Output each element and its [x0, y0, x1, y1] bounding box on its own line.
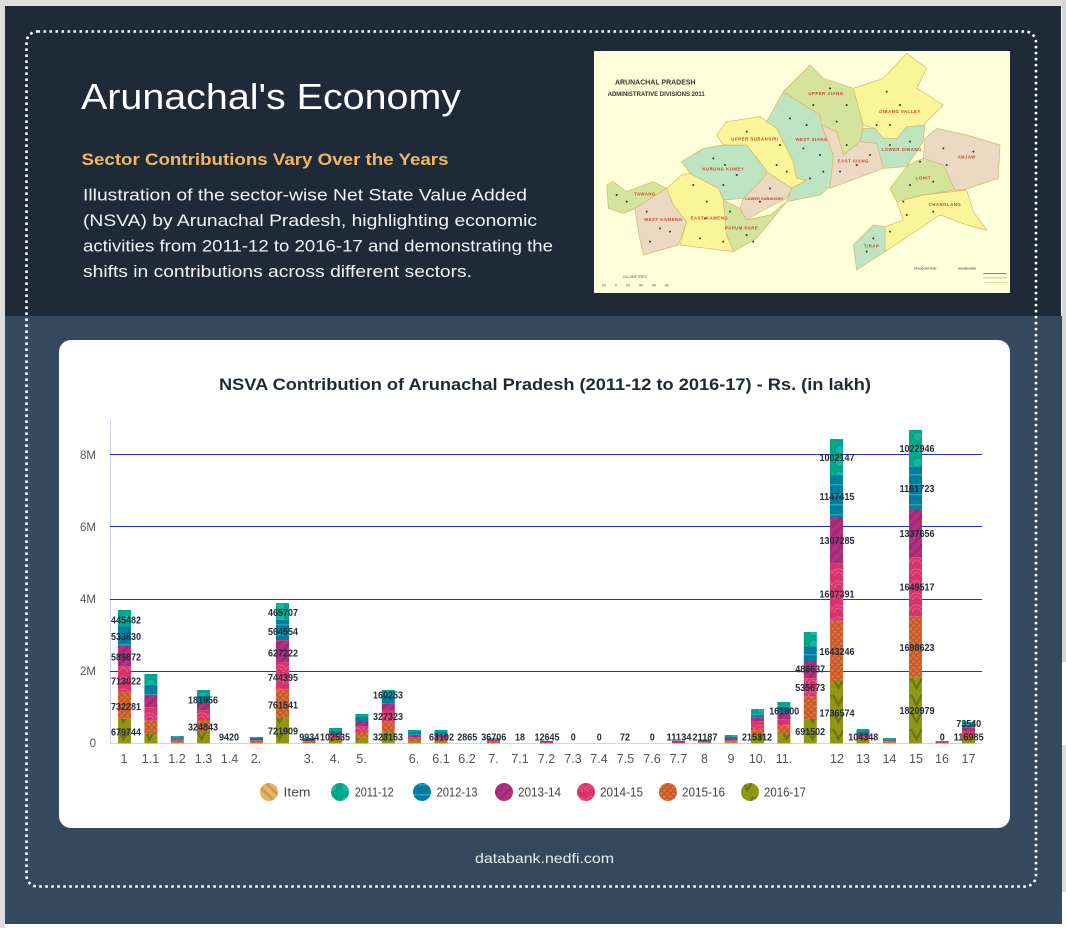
bar: item 6.	[408, 730, 421, 743]
map: Arunachal Pradesh administrative divisions: 20 0 20 40 60 80	[602, 283, 669, 287]
x axis labels: 15	[909, 752, 923, 766]
x axis labels: 16	[935, 752, 949, 766]
legend: 2013-14	[518, 786, 561, 800]
x axis labels: 10.	[749, 752, 766, 766]
x axis labels: 8	[701, 752, 708, 766]
map: Arunachal Pradesh administrative divisions: LOHIT	[916, 175, 931, 180]
x axis labels	[121, 752, 975, 766]
data labels: 1698623	[900, 642, 935, 654]
x axis labels: 14	[883, 752, 896, 766]
x axis labels: 7.5	[617, 752, 634, 766]
data labels: 589872	[111, 651, 141, 663]
data labels: 721909	[268, 725, 298, 737]
y axis labels: 2M	[80, 666, 96, 678]
chart axes and gridlines	[110, 420, 982, 744]
bar: item 3.	[303, 738, 316, 743]
source text: databank.nedfi.com	[475, 850, 614, 866]
x axis labels: 7.7	[670, 752, 687, 766]
data labels: 327323	[373, 711, 403, 723]
data labels: 713022	[111, 676, 141, 688]
data labels: 761541	[268, 699, 298, 711]
data labels: 1161723	[900, 483, 935, 495]
x axis labels: 4.	[330, 752, 340, 766]
description text: Illustration of the sector-wise Net State Value Added	[83, 186, 527, 205]
x axis labels: 7.	[488, 752, 499, 766]
bar: unlabelled category after 5.	[382, 690, 395, 743]
map: Arunachal Pradesh administrative divisions: TAWANG	[634, 192, 656, 197]
legend: 2015-16	[682, 786, 725, 800]
data labels: 465707	[268, 607, 298, 619]
data labels: 732281	[111, 701, 141, 713]
legend: 2012-13	[436, 786, 478, 800]
bar: item 14	[883, 738, 896, 743]
data labels: 1607391	[820, 588, 855, 600]
bar: item 13	[856, 729, 870, 743]
bar: unlabelled category after 11.	[804, 632, 817, 743]
data labels: 1022946	[900, 443, 935, 455]
map: Arunachal Pradesh administrative divisions: CHANGLANG	[929, 202, 961, 207]
description text: activities from 2011-12 to 2016-17 and demonstrating the	[83, 237, 553, 256]
bar: item 6.1	[434, 730, 448, 743]
map: Arunachal Pradesh administrative divisions: BOUNDARIES	[958, 266, 976, 270]
data labels: 1820979	[900, 705, 935, 717]
map: Arunachal Pradesh administrative divisions: HEADQUARTERS	[914, 266, 937, 270]
x axis labels: 1.1	[142, 752, 159, 766]
data labels: 323163	[373, 731, 403, 743]
data labels: 564554	[268, 626, 298, 638]
data labels: 1643246	[820, 646, 855, 658]
data labels: 1337656	[900, 528, 935, 540]
map: Arunachal Pradesh administrative divisions: WEST SIANG	[795, 137, 828, 142]
data labels: 116985	[954, 731, 984, 743]
bar: item 1.1	[144, 674, 157, 743]
bar: item 16	[936, 741, 949, 743]
x axis labels: 17	[962, 752, 975, 766]
description text: (NSVA) by Arunachal Pradesh, highlighting economic	[83, 211, 538, 230]
data labels: 18	[515, 731, 525, 743]
y axis labels: 0	[90, 738, 96, 750]
bar: unlabelled category after 2.	[276, 603, 289, 743]
data labels: 21187	[692, 731, 718, 743]
legend	[260, 783, 806, 801]
data labels: 1736574	[820, 707, 855, 719]
data labels: 1307285	[820, 535, 855, 547]
data labels: 535673	[795, 682, 825, 694]
legend: 2014-15	[600, 786, 643, 800]
y axis labels: 4M	[80, 594, 96, 606]
bar: item 7.	[487, 738, 500, 743]
bar: item 17	[962, 722, 975, 743]
x axis labels: 7.4	[590, 752, 608, 766]
data labels: 533830	[111, 631, 141, 643]
data labels: 1002147	[820, 452, 855, 464]
map: Arunachal Pradesh administrative divisions: UPPER SUBANSIRI	[731, 137, 779, 142]
map: Arunachal Pradesh administrative divisions: EAST SIANG	[838, 159, 869, 164]
bar: item 8	[698, 740, 711, 743]
x axis labels: 12	[830, 752, 844, 766]
data labels: 215312	[742, 731, 772, 743]
bar: item 5.	[355, 714, 368, 743]
data labels: 0	[940, 731, 945, 743]
bar: item 1.2	[171, 736, 184, 743]
bar: item 11.	[777, 702, 790, 743]
bar: item 4.	[329, 728, 342, 743]
bar: item 10.	[751, 709, 764, 743]
legend: Item	[284, 786, 310, 800]
x axis labels: 7.1	[511, 752, 529, 766]
chart title: NSVA Contribution of Arunachal Pradesh (2011-12 to 2016-17) - Rs. (in lakh)	[219, 375, 871, 394]
data labels: 12645	[534, 731, 560, 743]
x axis labels: 7.2	[538, 752, 555, 766]
description text	[83, 186, 553, 281]
map: Arunachal Pradesh administrative divisions: PAPUM PARE	[725, 225, 758, 230]
data labels: 679744	[111, 726, 141, 738]
bar: item 2.	[250, 737, 263, 743]
data labels: 691502	[795, 726, 825, 738]
map: Arunachal Pradesh administrative divisions: ANJAW	[958, 155, 976, 160]
data labels: 160253	[373, 689, 403, 701]
x axis labels: 1	[121, 752, 128, 766]
panel: blue lower background	[5, 316, 1062, 924]
data labels	[111, 443, 984, 743]
data labels: 0	[597, 731, 602, 743]
map: Arunachal Pradesh administrative divisions: WEST KAMENG	[644, 217, 683, 222]
y axis labels: 8M	[80, 450, 96, 462]
description text: shifts in contributions across different sectors.	[83, 262, 472, 281]
data labels: 36706	[481, 731, 506, 743]
bar: item 12	[830, 439, 843, 743]
data labels: 161800	[769, 705, 799, 717]
map: Arunachal Pradesh administrative divisions	[594, 51, 1010, 293]
x axis labels: 6.	[409, 752, 419, 766]
map: Arunachal Pradesh administrative divisions: KILOMETRES	[623, 275, 647, 279]
legend: 2011-12	[355, 786, 394, 800]
map: Arunachal Pradesh administrative divisions: EAST KAMENG	[691, 215, 728, 220]
x axis labels: 2.	[251, 752, 261, 766]
panel: chart card	[59, 340, 1010, 828]
legend: 2016-17	[764, 786, 806, 800]
data labels: 63102	[429, 731, 454, 743]
x axis labels: 6.2	[458, 752, 476, 766]
data labels: 11134	[666, 731, 692, 743]
y axis labels	[80, 450, 96, 750]
map: Arunachal Pradesh administrative divisions: TIRAP	[864, 244, 879, 249]
x axis labels: 7.3	[564, 752, 582, 766]
map: Arunachal Pradesh administrative divisions: ADMINISTRATIVE DIVISIONS 2011	[608, 92, 705, 98]
data labels: 486637	[795, 664, 825, 676]
data labels: 2865	[457, 731, 477, 743]
x axis labels: 1.4	[221, 752, 238, 766]
data labels: 627222	[268, 647, 298, 659]
panel: dark header background	[5, 6, 1061, 316]
map: Arunachal Pradesh administrative divisions: ARUNACHAL PRADESH	[615, 79, 696, 86]
map: Arunachal Pradesh administrative divisions: LOWER DIBANG	[881, 147, 922, 152]
map: Arunachal Pradesh administrative divisions: KURUNG KUMEY	[702, 167, 744, 172]
data labels: 445482	[111, 614, 141, 626]
bar: item 9	[725, 735, 738, 743]
data labels: 9420	[219, 731, 239, 743]
title: Arunachal's Economy	[81, 76, 461, 117]
data labels: 1649517	[900, 582, 935, 594]
map: Arunachal Pradesh administrative divisions: UPPER SIANG	[808, 91, 844, 96]
bar: item 1	[118, 610, 131, 743]
data labels: 9934	[299, 731, 319, 743]
data labels: 102535	[320, 731, 350, 743]
x axis labels: 9	[728, 752, 735, 766]
bar: item 7.7	[672, 741, 685, 743]
x axis labels: 1.3	[195, 752, 212, 766]
map: Arunachal Pradesh administrative divisions: DIBANG VALLEY	[879, 109, 921, 114]
x axis labels: 13	[856, 752, 870, 766]
data labels: 0	[571, 731, 576, 743]
data labels: 744395	[268, 672, 298, 684]
x axis labels: 3.	[304, 752, 314, 766]
data labels: 181956	[188, 694, 218, 706]
bar: item 7.2	[540, 741, 553, 743]
data labels: 72	[620, 731, 630, 743]
bar: item 15	[909, 430, 922, 743]
bar: item 1.3	[197, 690, 210, 743]
x axis labels: 7.6	[643, 752, 661, 766]
x axis labels: 5.	[356, 752, 367, 766]
map: Arunachal Pradesh administrative divisions: LOWER SUBANSIRI	[745, 196, 783, 201]
x axis labels: 11.	[776, 752, 792, 766]
data labels: 104348	[848, 731, 878, 743]
data labels: 324843	[188, 721, 218, 733]
subtitle: Sector Contributions Vary Over the Years	[82, 151, 448, 169]
data labels: 1147415	[820, 491, 855, 503]
x axis labels: 6.1	[432, 752, 450, 766]
data labels: 73540	[956, 718, 981, 730]
data labels: 0	[650, 731, 655, 743]
y axis labels: 6M	[80, 522, 96, 534]
x axis labels: 1.2	[168, 752, 186, 766]
